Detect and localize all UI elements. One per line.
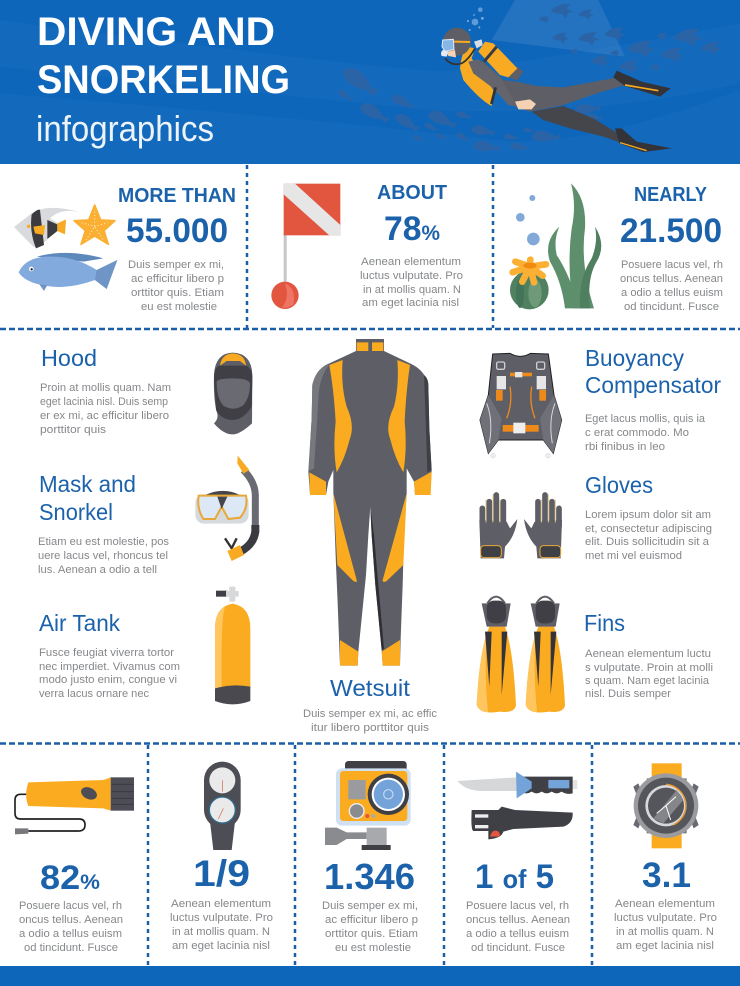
- item: wetsuit: Duis semper ex mi, ac effic: [303, 708, 437, 720]
- panel: dive watch 3.1: am eget lacinia nisl: [616, 940, 714, 952]
- panel: flashlight 82%: a odio a tellus euism: [19, 928, 122, 940]
- item: hood: Hood: [41, 345, 97, 371]
- footer bar: [0, 966, 740, 986]
- icon: air tank: [215, 587, 250, 704]
- header banner: [0, 0, 740, 165]
- icon: gloves: [479, 494, 562, 558]
- item: wetsuit: Wetsuit: [330, 675, 411, 701]
- panel: flashlight 82%: 82%: [40, 859, 100, 897]
- panel: gauge 1/9: Aenean elementum: [171, 898, 271, 910]
- panel: flashlight 82%: Posuere lacus vel, rh: [19, 900, 122, 912]
- panel: knife 1 of 5: [457, 772, 577, 954]
- icon: starfish: [74, 205, 115, 244]
- item: air tank: modo justo enim, congue vi: [39, 674, 177, 686]
- panel: knife 1 of 5: 1 of 5: [475, 858, 554, 896]
- icon: angelfish: [14, 208, 78, 248]
- panel: about 78%: [271, 182, 463, 309]
- title: DIVING AND: [37, 10, 275, 54]
- title: infographics: [36, 108, 214, 149]
- item: wetsuit: itur libero porttitor quis: [311, 722, 429, 734]
- item: mask and snorkel: lus. Aenean a odio a tell: [38, 564, 157, 576]
- item: mask and snorkel: uere lacus vel, rhoncus tel: [38, 550, 168, 562]
- title: SNORKELING: [37, 58, 290, 102]
- panel: more than 55.000: [14, 185, 236, 313]
- item: buoyancy compensator: Buoyancy: [585, 345, 684, 371]
- item: air tank: Air Tank: [39, 610, 120, 636]
- panel: dive watch 3.1: in at mollis quam. N: [616, 926, 714, 938]
- icon: dive knife and sheath: [457, 772, 577, 839]
- item: gloves: met mi vel euismod: [585, 550, 682, 562]
- panel: nearly 21.500: 21.500: [620, 212, 722, 250]
- panel: nearly 21.500: NEARLY: [634, 184, 708, 206]
- item: buoyancy compensator: Eget lacus mollis, quis ia: [585, 413, 706, 425]
- panel: knife 1 of 5: od tincidunt. Fusce: [471, 942, 565, 954]
- item: buoyancy compensator: [480, 345, 721, 458]
- school of fish: lower left: [337, 64, 603, 151]
- panel: dive watch 3.1: 3.1: [642, 856, 691, 895]
- icon: action camera: [325, 761, 411, 850]
- panel: knife 1 of 5: oncus tellus. Aenean: [466, 914, 570, 926]
- panel: flashlight 82%: od tincidunt. Fusce: [24, 942, 118, 954]
- panel: action camera 1.346: orttitor quis. Etiam: [325, 928, 418, 940]
- panel: more than 55.000: 55.000: [126, 212, 228, 250]
- item: gloves: Lorem ipsum dolor sit am: [585, 509, 711, 521]
- item: wetsuit: [303, 339, 437, 734]
- item: buoyancy compensator: rbi finibus in leo: [585, 441, 665, 453]
- panel: action camera 1.346: eu est molestie: [335, 942, 411, 954]
- panel: dive watch 3.1: luctus vulputate. Pro: [614, 912, 717, 924]
- item: buoyancy compensator: Compensator: [585, 372, 721, 398]
- panel: gauge 1/9: 1/9: [193, 853, 250, 894]
- icon: pressure gauge: [204, 762, 241, 850]
- item: fins: Aenean elementum luctu: [585, 648, 711, 660]
- panel: about 78%: am eget lacinia nisl: [362, 297, 459, 309]
- panel: gauge 1/9: am eget lacinia nisl: [172, 940, 270, 952]
- panel: more than 55.000: Duis semper ex mi,: [128, 259, 224, 271]
- icon: fins: [477, 597, 565, 712]
- panel: action camera 1.346: ac efficitur libero p: [325, 914, 418, 926]
- item: air tank: Fusce feugiat viverra tortor: [39, 647, 174, 659]
- item: hood: [40, 345, 252, 436]
- item: fins: Fins: [584, 610, 625, 636]
- panel: dive watch 3.1: [614, 763, 717, 952]
- item: gloves: elit. Duis sollicitudin sit a: [585, 536, 710, 548]
- item: hood: eget lacinia nisl. Duis semp: [40, 396, 168, 408]
- item: hood: er ex mi, ac efficitur libero: [40, 410, 169, 422]
- icon: hood: [214, 353, 252, 434]
- panel: gauge 1/9: [170, 762, 273, 952]
- item: air tank: verra lacus ornare nec: [39, 688, 149, 700]
- illustration: scuba diver: [441, 7, 672, 152]
- panel: more than 55.000: MORE THAN: [118, 185, 236, 207]
- panel: action camera 1.346: [322, 761, 418, 954]
- panel: nearly 21.500: [510, 183, 723, 313]
- panel: gauge 1/9: in at mollis quam. N: [172, 926, 270, 938]
- icon: dive watch: [633, 763, 699, 848]
- item: air tank: nec imperdiet. Vivamus com: [39, 661, 180, 673]
- title: [36, 10, 290, 149]
- panel: nearly 21.500: a odio a tellus euism: [621, 287, 723, 299]
- item: fins: [477, 597, 713, 712]
- icon: wetsuit: [308, 339, 432, 666]
- item: mask and snorkel: Etiam eu est molestie, pos: [38, 536, 169, 548]
- panel: about 78%: luctus vulputate. Pro: [360, 270, 463, 282]
- item: mask and snorkel: Mask and: [39, 471, 136, 497]
- panel: about 78%: Aenean elementum: [361, 256, 461, 268]
- panel: gauge 1/9: luctus vulputate. Pro: [170, 912, 273, 924]
- item: gloves: [479, 472, 712, 562]
- panel: knife 1 of 5: a odio a tellus euism: [466, 928, 569, 940]
- item: hood: porttitor quis: [40, 424, 106, 436]
- item: mask and snorkel: Snorkel: [39, 499, 113, 525]
- panel: nearly 21.500: od tincidunt. Fusce: [624, 301, 719, 313]
- panel: nearly 21.500: oncus tellus. Aenean: [620, 273, 723, 285]
- item: air tank: [39, 587, 250, 704]
- item: buoyancy compensator: c erat commodo. Mo: [585, 427, 689, 439]
- icon: buoyancy compensator: [480, 353, 562, 458]
- item: mask and snorkel: [38, 456, 255, 576]
- panel: flashlight 82%: [15, 777, 134, 954]
- icon: bubbles, seaweed and anemone: [510, 183, 601, 309]
- school of fish: upper right: [539, 4, 722, 74]
- panel: action camera 1.346: 1.346: [324, 856, 415, 897]
- item: fins: s quam. Nam eget lacinia: [585, 675, 710, 687]
- item: fins: s vulputate. Proin at molli: [585, 662, 713, 674]
- panel: about 78%: in at mollis quam. N: [363, 284, 461, 296]
- panel: about 78%: ABOUT: [377, 182, 447, 204]
- item: gloves: Gloves: [585, 472, 653, 498]
- item: hood: Proin at mollis quam. Nam: [40, 382, 171, 394]
- icon: blue fish: [19, 253, 117, 291]
- icon: flashlight: [15, 777, 134, 834]
- panel: flashlight 82%: oncus tellus. Aenean: [19, 914, 123, 926]
- icon: dive flag: [271, 184, 340, 309]
- panel: more than 55.000: eu est molestie: [141, 301, 217, 313]
- panel: nearly 21.500: Posuere lacus vel, rh: [621, 259, 723, 271]
- item: fins: nisl. Duis semper: [585, 688, 671, 700]
- panel: dive watch 3.1: Aenean elementum: [615, 898, 715, 910]
- panel: about 78%: 78%: [384, 210, 440, 248]
- icon: mask and snorkel: [195, 456, 255, 561]
- panel: more than 55.000: ac efficitur libero p: [131, 273, 224, 285]
- panel: action camera 1.346: Duis semper ex mi,: [322, 900, 418, 912]
- panel: knife 1 of 5: Posuere lacus vel, rh: [466, 900, 569, 912]
- item: gloves: et, consectetur adipiscing: [585, 523, 712, 535]
- panel: more than 55.000: orttitor quis. Etiam: [131, 287, 224, 299]
